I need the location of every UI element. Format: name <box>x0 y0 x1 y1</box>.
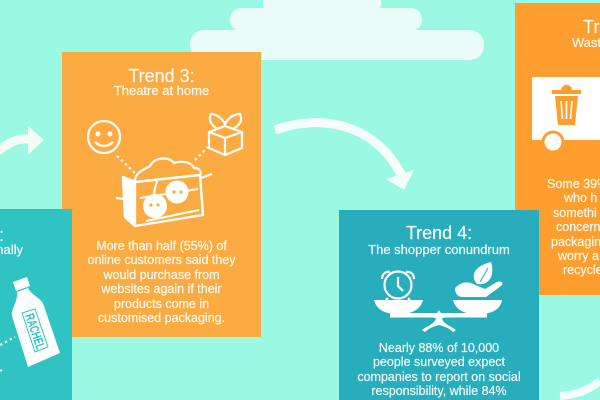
text block: trend 3 body <box>88 239 236 325</box>
cloud <box>190 0 484 60</box>
panel: trend 4 <box>339 210 539 400</box>
icon: scales with clock and leaf <box>374 262 502 332</box>
icon: water bottle: RACHEL <box>22 312 48 351</box>
text block: trend 4 body: responsibility, while 84% <box>371 384 507 398</box>
subheading: the shopper conundrum: The shopper conundrum <box>368 242 510 257</box>
text block: trend 5 body: somethi <box>553 206 597 220</box>
text block: trend 3 body: More than half (55%) of <box>96 239 227 253</box>
text block: trend 3 body: customised packaging. <box>98 311 225 325</box>
text block: trend 4 body: companies to report on social <box>357 370 521 384</box>
panel: trend 5 (cropped) <box>515 3 600 295</box>
text block: trend 3 body: online customers said they <box>88 253 236 267</box>
arrow: bottom right curve <box>560 378 600 400</box>
text block: trend 3 body: websites again if their <box>101 282 222 296</box>
heading: trend 3: Trend 3: <box>128 66 195 86</box>
text block: trend 4 body <box>357 341 521 398</box>
text block: trend 4 body: people surveyed expect <box>373 355 505 369</box>
panel: trend 3 <box>62 52 261 337</box>
panel: trend 2 (cropped) <box>0 209 72 400</box>
icon: smiley, gift and popcorn box <box>86 112 244 228</box>
text block: trend 5 body <box>547 177 600 277</box>
subheading: theatre at home: Theatre at home <box>114 83 209 98</box>
heading: trend 4: Trend 4: <box>406 223 472 243</box>
text block: trend 5 body: packagin <box>551 235 600 249</box>
icon: rubbish truck with bin <box>532 77 600 150</box>
text block: trend 4 body: Nearly 88% of 10,000 <box>379 341 499 355</box>
icon: water bottle <box>0 277 60 372</box>
arrow: from trend 2 to trend 3 <box>0 126 44 155</box>
text block: trend 5 body: who h <box>564 191 597 205</box>
text block: trend 5 body: concern <box>556 220 600 234</box>
text block: trend 5 body: worry a <box>558 249 599 263</box>
text block: trend 3 body: would purchase from <box>103 268 220 282</box>
text block: trend 3 body: products come in <box>114 297 209 311</box>
arrow: trend 3 to trend 4 <box>274 118 414 190</box>
